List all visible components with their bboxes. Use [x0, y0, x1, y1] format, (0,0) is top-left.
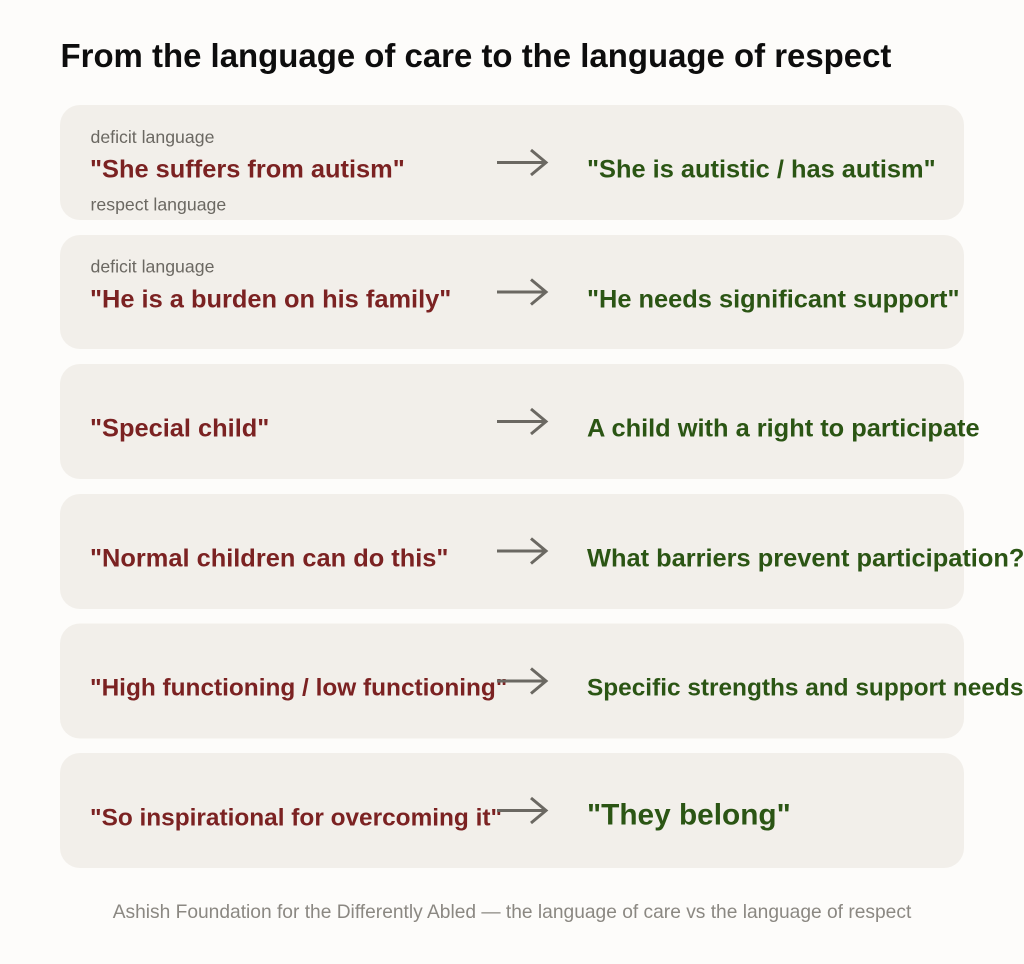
panel: inspirational [60, 753, 964, 868]
deficit phrase: "He is a burden on his family" [90, 286, 451, 314]
arrow [497, 538, 546, 564]
arrow [497, 668, 546, 694]
arrow [497, 798, 546, 823]
respect phrase: "He needs significant support" [587, 286, 960, 314]
arrow [497, 150, 546, 175]
label: deficit language: deficit language [90, 256, 215, 276]
arrow [497, 280, 546, 304]
panel: normal children [60, 494, 1024, 609]
footer caption: Ashish Foundation for the Differently Abled — the language of care vs the language of respect [113, 902, 912, 923]
respect phrase: A child with a right to participate [587, 414, 980, 442]
label: deficit language: deficit language [90, 127, 215, 147]
respect phrase: Specific strengths and support needs [587, 674, 1023, 702]
deficit phrase: "She suffers from autism" [90, 156, 405, 184]
respect phrase: "They belong" [587, 798, 791, 832]
arrow [497, 409, 546, 434]
label: respect language: respect language [90, 194, 226, 214]
panel: she suffers from autism [60, 105, 964, 220]
panel: burden on family [60, 235, 964, 349]
panel: functioning labels [60, 624, 1023, 738]
title: From the language of care to the language of respect [60, 37, 891, 74]
deficit phrase: "Special child" [90, 414, 269, 442]
respect phrase: "She is autistic / has autism" [587, 156, 936, 184]
deficit phrase: "Normal children can do this" [90, 544, 448, 572]
deficit phrase: "So inspirational for overcoming it" [90, 804, 502, 832]
respect phrase: What barriers prevent participation? [587, 544, 1024, 572]
panel: special child [60, 364, 980, 479]
deficit phrase: "High functioning / low functioning" [90, 674, 507, 702]
